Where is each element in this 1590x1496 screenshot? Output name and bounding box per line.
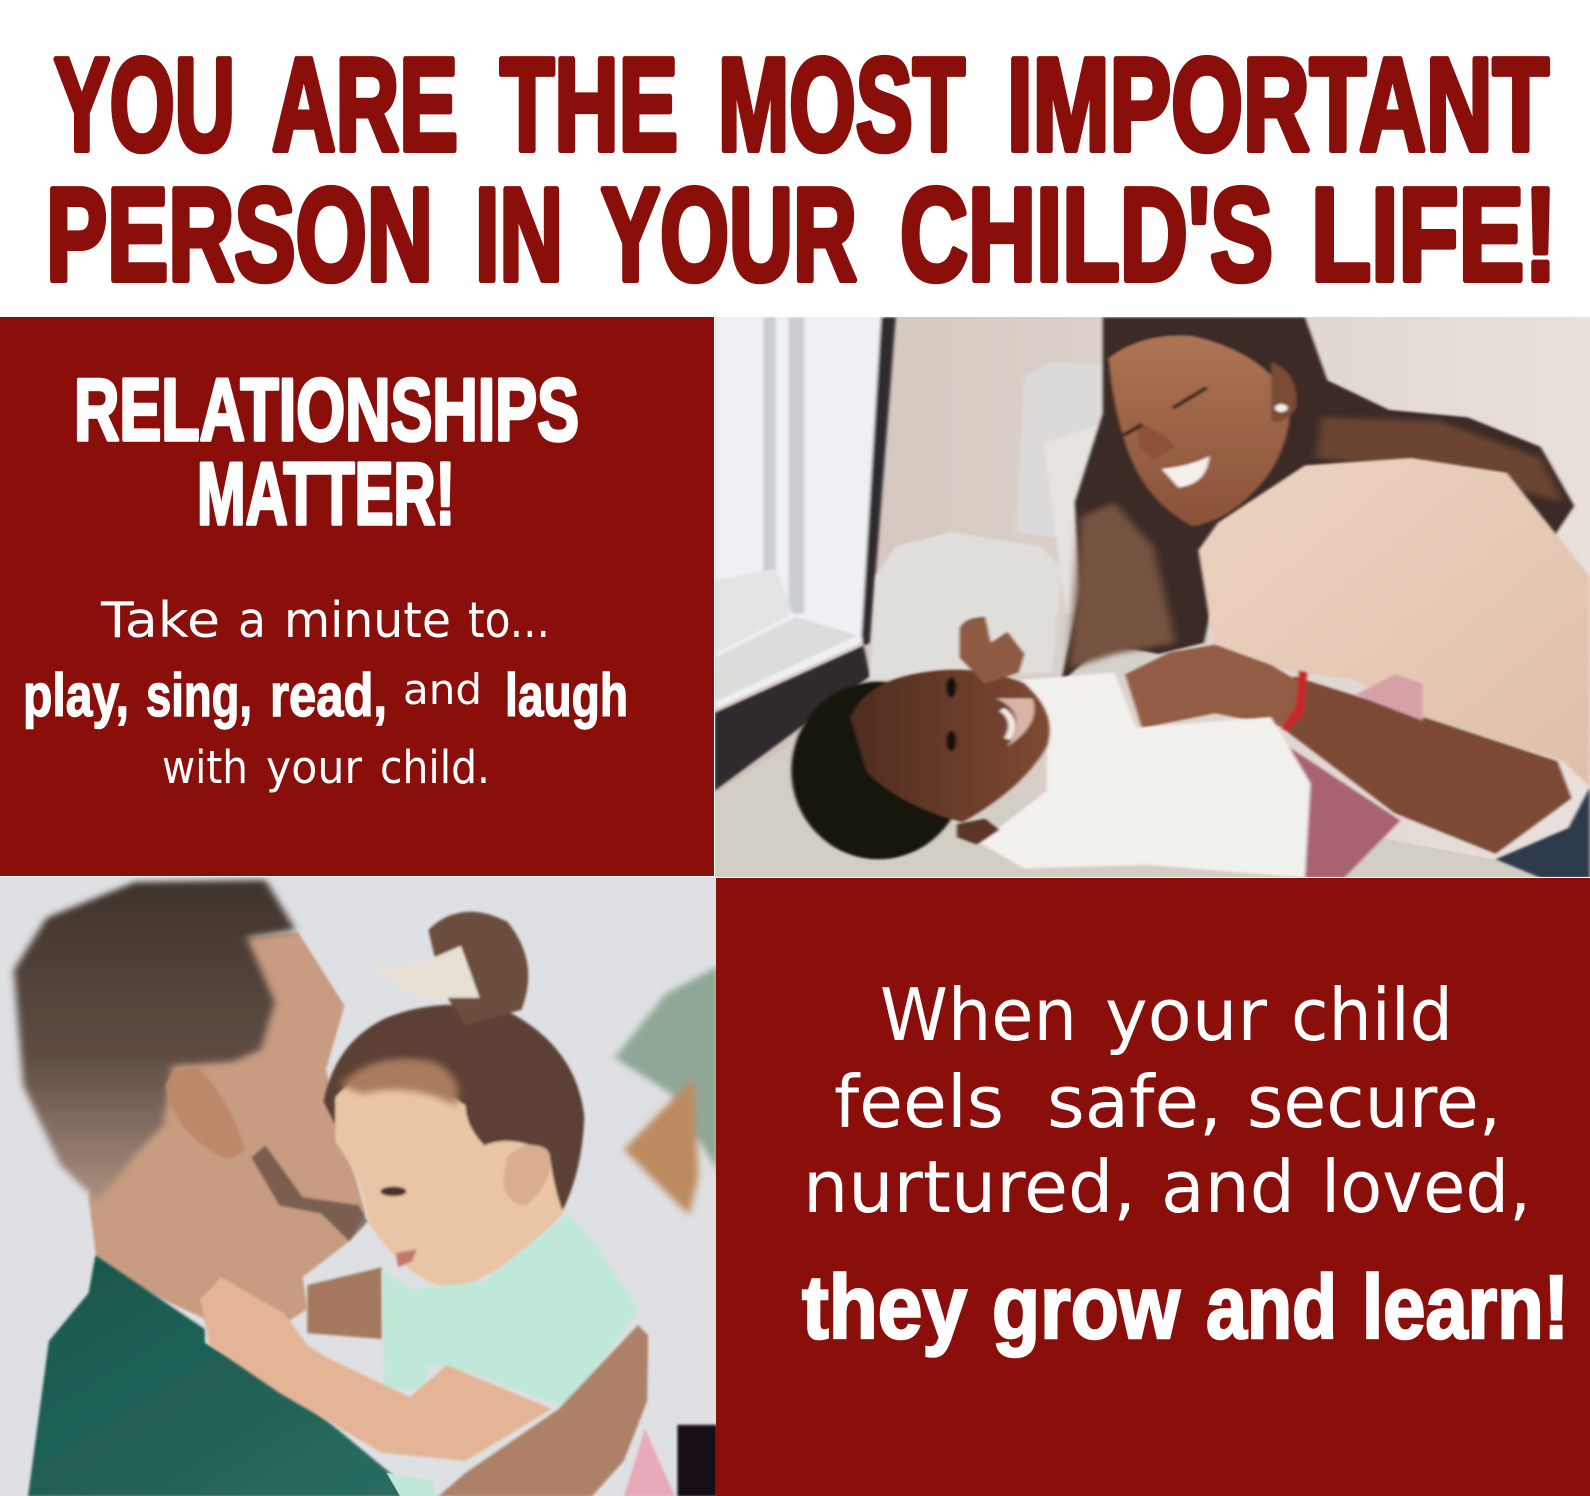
window [714,310,896,791]
title: YOU [54,31,235,178]
title [46,31,1557,308]
baby shirt [382,1213,638,1409]
sofa [870,362,1167,680]
text block: when your child: When [880,973,1077,1057]
text block: when your child: safe, [1047,1060,1222,1144]
callout: they grow and learn: grow [992,1258,1181,1358]
callout: they grow and learn: they [802,1258,967,1358]
father skin [88,932,365,1321]
text block: when your child: your [1105,973,1267,1057]
baby head [791,617,1050,859]
text block: when your child: feels [834,1060,1004,1144]
blurred wall decoration [615,966,719,1215]
father ear and beard [165,1068,368,1241]
text block: take a minute: your [266,741,362,794]
woman arm and hand [1125,645,1571,854]
father arm [438,1325,648,1496]
callout: they grow and learn: and [1206,1258,1337,1358]
text block: when your child: loved, [1321,1145,1531,1229]
text block: take a minute: play, [23,662,129,729]
text block: take a minute: with [162,741,248,794]
text block: when your child: and [1161,1145,1295,1229]
text block: take a minute: read, [270,662,387,729]
text block: take a minute [23,592,628,794]
text block: when your child: secure, [1247,1060,1501,1144]
father sweater [28,1255,419,1496]
panel: relationships matter [0,317,714,876]
father hair [14,880,296,1201]
baby clothes [979,673,1590,878]
heading: relationships matter: MATTER! [197,444,455,543]
text block: when your child: child [1291,973,1453,1057]
woman hair [1061,317,1574,684]
title: MOST [718,31,965,178]
woman sweater [1198,458,1590,787]
photo: father holding daughter [0,870,731,1496]
title: THE [500,31,678,178]
baby far arm [307,1267,382,1339]
title: PERSON [46,161,433,308]
text block: take a minute: a [238,592,266,649]
title: CHILD'S [900,161,1273,308]
title: YOUR [601,161,857,308]
text block: take a minute: laugh [505,662,628,729]
heading: relationships matter: RELATIONSHIPS [74,360,579,459]
title: IN [475,161,563,308]
baby hand and arm [200,1277,552,1461]
title: ARE [272,31,458,178]
photo: mother laughing with baby [710,310,1590,890]
text block: when your child [803,973,1531,1229]
heading: relationships matter [74,360,579,543]
baby head [324,912,584,1289]
text block: take a minute: minute [284,592,451,649]
text block: take a minute: child. [380,741,490,794]
woman face [1108,335,1297,526]
seat [715,744,1539,877]
text block: take a minute: to... [468,592,550,649]
text block: take a minute: Take [100,592,220,649]
panel: grow and learn [716,878,1590,1496]
text block: take a minute: and [403,665,482,714]
callout: they grow and learn [802,1258,1569,1358]
dress details [624,1429,675,1496]
text block: take a minute: sing, [146,662,252,729]
text block: when your child: nurtured, [803,1145,1136,1229]
